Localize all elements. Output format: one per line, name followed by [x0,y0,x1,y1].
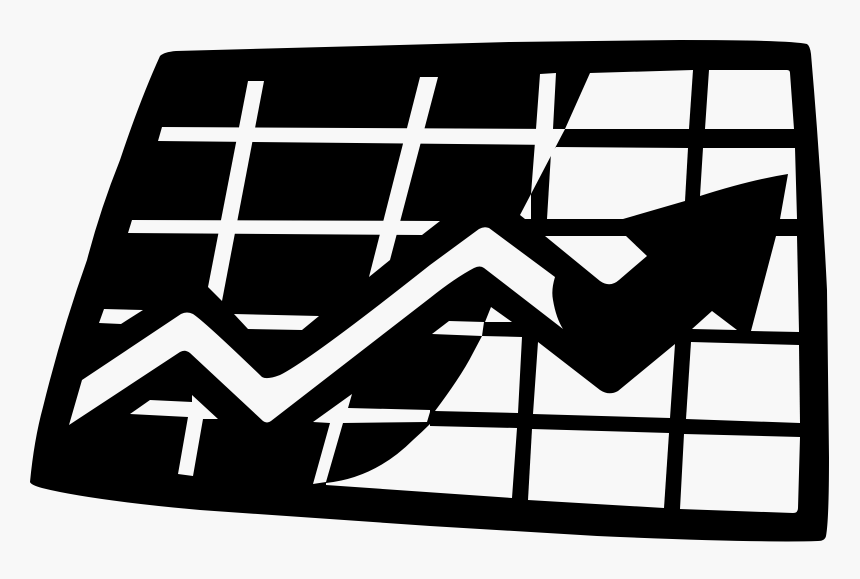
small arrow: left upright [130,395,218,476]
trend line: white zigzag band [69,227,563,425]
grid: white lines on the dark side [99,73,565,330]
grid: white cells on the light side [326,70,800,513]
small arrow: middle upright [313,394,430,484]
grid: bar fragment under the trend line [432,321,484,336]
